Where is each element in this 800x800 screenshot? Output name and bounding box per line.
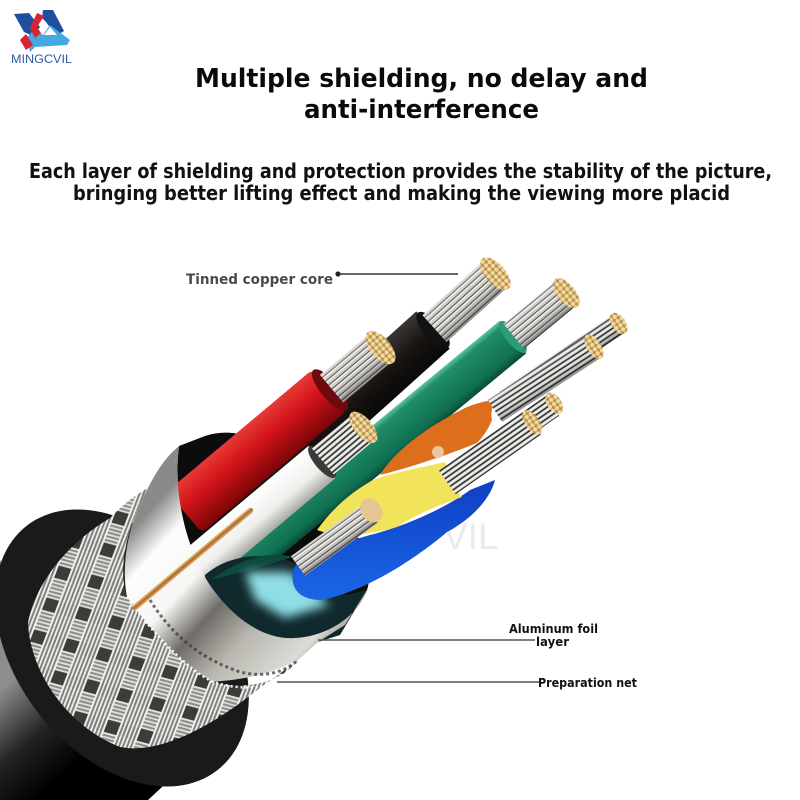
foil shield interior bbox=[177, 433, 369, 638]
logo: MINGCVIL bbox=[11, 10, 72, 66]
title bbox=[195, 64, 648, 125]
logo: MINGCVIL: MINGCVIL bbox=[11, 52, 72, 66]
wire: white bbox=[163, 405, 384, 600]
wire: blue bbox=[292, 480, 495, 600]
callout: aluminum foil layer bbox=[318, 622, 598, 649]
wire: green bbox=[199, 271, 587, 601]
braid edge bbox=[127, 597, 282, 688]
wire: red bbox=[167, 320, 406, 533]
wire: orange rear strands bbox=[498, 310, 631, 410]
jacket end face bbox=[0, 461, 301, 800]
title: Multiple shielding, no delay and bbox=[195, 64, 648, 94]
foil shield bbox=[125, 446, 367, 682]
cable illustration bbox=[0, 249, 631, 800]
outer jacket body bbox=[0, 560, 245, 800]
callout: aluminum foil layer: Aluminum foil bbox=[509, 622, 598, 636]
foil scalloped edge bbox=[150, 600, 298, 674]
wire: silver twisted core bbox=[289, 494, 388, 576]
copper drain wire bbox=[131, 506, 254, 611]
callout: tinned copper core bbox=[186, 271, 458, 288]
callout: preparation net: Preparation net bbox=[538, 676, 637, 690]
callout: aluminum foil layer: layer bbox=[536, 635, 569, 649]
wire: yellow strands bbox=[438, 389, 570, 494]
subtitle text: bringing better lifting effect and making the viewing more placid bbox=[73, 181, 730, 205]
wire: teal inner shield bbox=[205, 555, 367, 650]
wire: orange bbox=[380, 400, 497, 475]
watermark: VIL bbox=[443, 516, 499, 557]
wire: black bbox=[216, 249, 520, 529]
subtitle text bbox=[29, 159, 772, 205]
title: anti-interference bbox=[304, 95, 539, 125]
callout: tinned copper core: Tinned copper core bbox=[186, 272, 333, 288]
wire: yellow bbox=[317, 462, 462, 535]
braided shield bbox=[28, 488, 298, 748]
wire: orange front strands bbox=[487, 331, 607, 423]
